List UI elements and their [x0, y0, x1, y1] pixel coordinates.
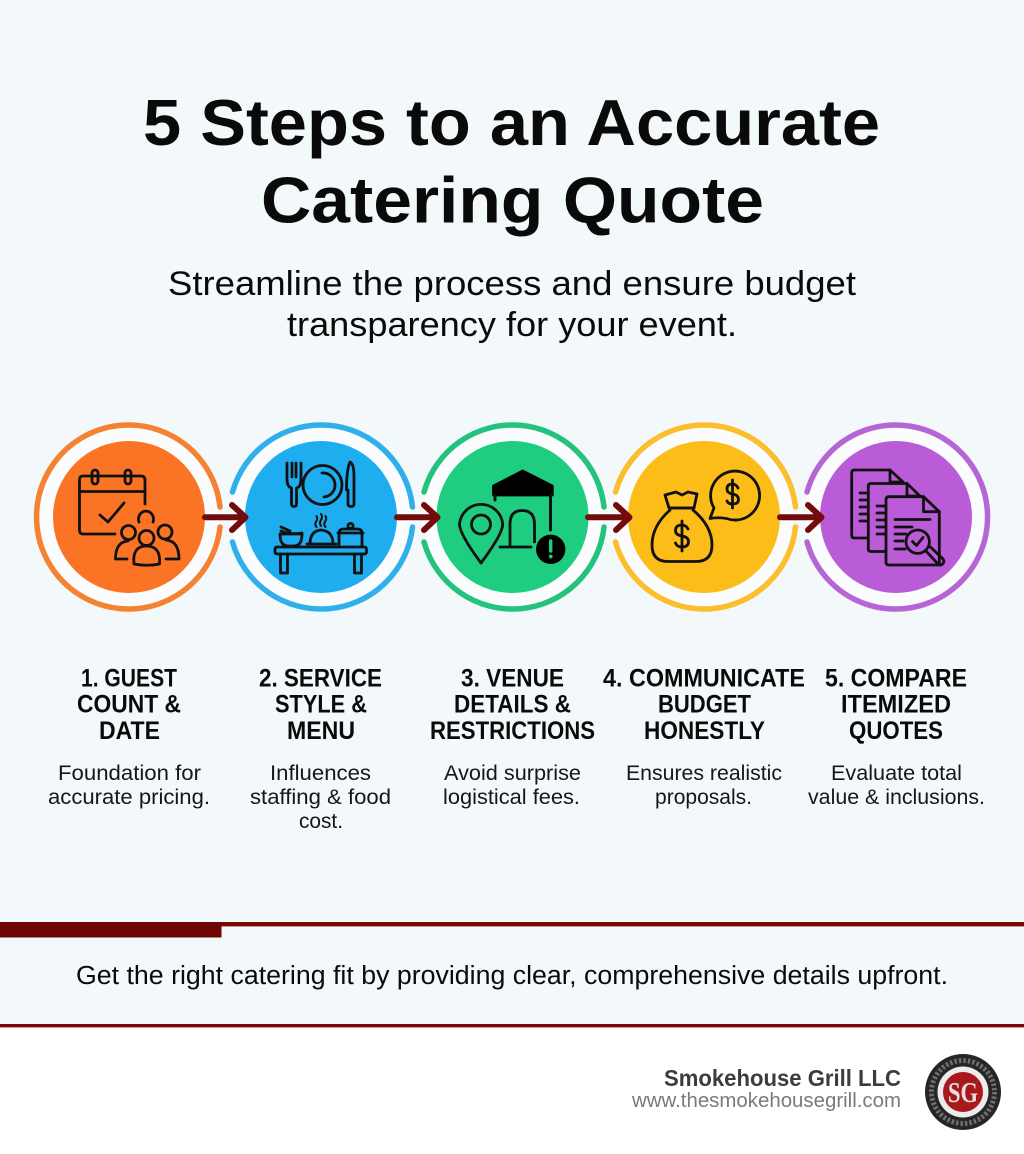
company name and website: Smokehouse Grill LLC — [664, 1065, 901, 1091]
step 1 circle: guest count and date — [37, 425, 220, 609]
company name and website — [631, 1065, 901, 1112]
step 4 circle: communicate budget honestly — [614, 425, 796, 609]
icon: place setting and buffet table — [275, 462, 366, 573]
company name and website: www.thesmokehousegrill.com — [631, 1090, 901, 1112]
footer band — [0, 1024, 1024, 1154]
step 1 text: COUNT & — [77, 691, 181, 719]
step 2 circle: service style and menu — [231, 425, 412, 609]
top rule with thick accent — [0, 922, 1024, 938]
title: Catering Quote — [261, 164, 764, 236]
takeaway statement: Get the right catering fit by providing clear, comprehensive details upfront. — [76, 962, 948, 990]
step 3 text — [430, 665, 595, 809]
title — [143, 86, 880, 236]
icon: documents and magnifier — [852, 470, 944, 565]
step 2 text: STYLE & — [275, 691, 367, 719]
logo: SG badge: SG — [948, 1078, 978, 1109]
step 5 text: Evaluate total — [831, 762, 962, 785]
logo: SG badge — [925, 1054, 1001, 1130]
step 3 text: Avoid surprise — [444, 762, 581, 785]
subtitle — [168, 265, 857, 344]
arrow: step 2 to 3 — [397, 505, 438, 530]
step 2 text: MENU — [287, 717, 355, 745]
arrow: step 1 to 2 — [205, 505, 246, 530]
step 4 text — [603, 665, 805, 809]
step 5 text: 5. COMPARE — [825, 665, 967, 693]
step 2 text: Influences — [270, 762, 371, 785]
step 4 text: Ensures realistic — [626, 762, 782, 785]
step 1 text — [48, 665, 210, 809]
step 1 text: Foundation for — [58, 762, 201, 785]
step 3 text: DETAILS & — [454, 691, 571, 719]
step 5 circle: compare itemized quotes — [806, 425, 988, 609]
arrow: step 4 to 5 — [780, 505, 822, 530]
step 5 text: value & inclusions. — [808, 786, 985, 809]
subtitle: Streamline the process and ensure budget — [168, 265, 857, 303]
step 2 text: 2. SERVICE — [259, 665, 382, 693]
step 3 text: logistical fees. — [443, 786, 580, 809]
step 1 text: DATE — [99, 717, 160, 745]
step 3 circle: venue details and restrictions — [422, 425, 604, 609]
title: 5 Steps to an Accurate — [143, 86, 880, 159]
step 3 text: 3. VENUE — [461, 665, 564, 693]
step 4 text: proposals. — [655, 786, 752, 809]
icon: money bag and dollar speech bubble — [652, 471, 760, 562]
step 2 text: cost. — [299, 810, 343, 833]
subtitle: transparency for your event. — [287, 306, 737, 344]
step 4 text: 4. COMMUNICATE — [603, 665, 805, 693]
step 2 text: staffing & food — [250, 786, 391, 809]
step 5 text: ITEMIZED — [841, 691, 951, 719]
step 4 text: HONESTLY — [644, 717, 765, 745]
step 2 text — [250, 665, 391, 833]
icon: tent, location pin and alert — [460, 471, 565, 564]
step 5 text: QUOTES — [849, 717, 943, 745]
step 3 text: RESTRICTIONS — [430, 717, 595, 745]
icon: calendar with guests — [80, 470, 179, 565]
step 1 text: 1. GUEST — [81, 665, 177, 693]
arrow: step 3 to 4 — [588, 505, 630, 530]
step 1 text: accurate pricing. — [48, 786, 210, 809]
step 4 text: BUDGET — [658, 691, 751, 719]
step 5 text — [808, 665, 985, 809]
